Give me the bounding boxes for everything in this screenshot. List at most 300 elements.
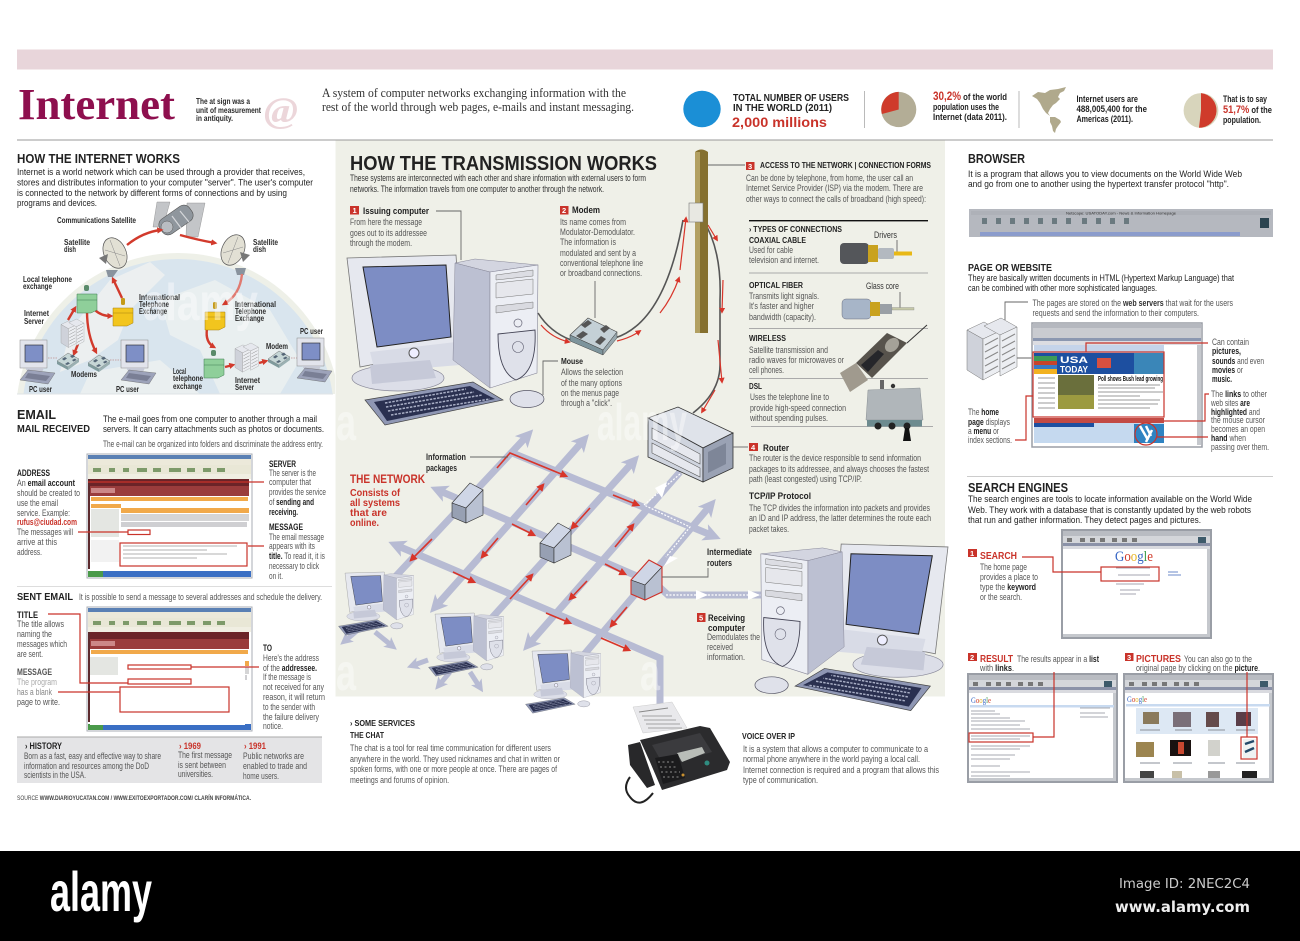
- icons: modems and PCs: [20, 338, 332, 384]
- text block: The e-mail can be organized into folders and discriminate the address entry.: [103, 439, 323, 449]
- callout: server and message: provides the service: [269, 487, 326, 497]
- stats strip: [683, 87, 1272, 133]
- intro text: rest of the world through web pages, e-mails and instant messaging.: [322, 100, 634, 114]
- callout: address: use the email: [17, 498, 58, 508]
- callout: pictures and links: passing over them.: [1211, 442, 1269, 452]
- callout: pictures and links: hand when: [1211, 433, 1246, 443]
- callout: the network: that are: [350, 507, 387, 519]
- callout: pictures and links: Can contain: [1212, 337, 1249, 347]
- icon: mouse callout: through a "click".: [561, 398, 612, 408]
- screenshot: results: Google: [971, 696, 991, 705]
- screenshot: browser toolbar: [969, 209, 1273, 237]
- item: coaxial cable: Used for cable: [749, 245, 793, 255]
- callout: address: service. Example:: [17, 508, 70, 518]
- text block: and go from one to another using the hypertext transfer protocol "http".: [968, 179, 1229, 190]
- step 3: access to the network: [708, 160, 931, 204]
- text block: [968, 169, 1242, 190]
- stat: Americas pie: 51,7% of the: [1223, 104, 1272, 116]
- note: at sign: [196, 97, 261, 123]
- icons: servers: [61, 319, 258, 372]
- text block: [968, 494, 1252, 525]
- diagram labels: exchange: [23, 282, 52, 291]
- panel: history: scientists in the USA.: [24, 770, 86, 780]
- step 2: modem: conventional telephone line: [560, 258, 643, 268]
- panel: some services: › SOME SERVICES: [350, 718, 415, 728]
- source line: SOURCE WWW.DIARIOYUCATAN.COM / WWW.EXITOEXPORTADOR.COM/ CLARÍN INFORMÁTICA.: [17, 794, 251, 802]
- item: wireless: WIRELESS: [749, 333, 786, 343]
- text block: stores and distributes information to your computer "server". The user's computer: [17, 178, 314, 188]
- callout: web servers: [1005, 298, 1233, 358]
- diagram labels: dish: [253, 245, 266, 254]
- icons: exchanges: [77, 285, 225, 378]
- step 1: issuing computer: 1: [352, 206, 357, 215]
- diagram labels: Server: [24, 317, 45, 326]
- item: optical fiber: Transmits light signals.: [749, 291, 819, 301]
- text block: programs and devices.: [17, 198, 97, 209]
- text block: servers. It can carry attachments such as photos or documents.: [103, 424, 324, 435]
- callout: to: Here's the address: [263, 653, 319, 663]
- step: search: The home page: [980, 562, 1027, 572]
- text block: [350, 173, 646, 194]
- step 2: modem: Modulator-Demodulator.: [560, 227, 635, 237]
- text block: It is a program that allows you to view documents on the World Wide Web: [968, 169, 1242, 180]
- callout: pictures and links: pictures,: [1212, 346, 1241, 356]
- callout: home page: page displays: [968, 417, 1010, 427]
- step: search: SEARCH: [980, 550, 1017, 562]
- panel: some services: [350, 718, 939, 785]
- callout: pictures and links: [1210, 337, 1269, 452]
- callout: to: reason, it will return: [263, 692, 325, 702]
- label: information packages: [426, 452, 508, 473]
- text block: is connected to the network by different forms of connections and by using: [17, 188, 287, 199]
- diagram labels: Local: [173, 367, 186, 376]
- service: the chat: The chat is a tool for real time communication for different users: [350, 743, 551, 753]
- callout: web servers: The pages are stored on the web servers that wait for the users: [1032, 298, 1233, 308]
- callout: to: of the addressee.: [263, 663, 317, 673]
- step 4: router: path (least congested) using TCP/IP.: [749, 474, 862, 484]
- service: voice over IP: [742, 731, 939, 785]
- arrows: packets: [411, 453, 638, 650]
- step: search: provides a place to: [980, 572, 1038, 582]
- stat: world population pie: population uses the: [933, 102, 999, 112]
- stat: total users: TOTAL NUMBER OF USERS: [733, 93, 849, 104]
- callout: home page: The home: [968, 407, 999, 417]
- service: voice over IP: normal phone anywhere in the world paying a local call.: [743, 754, 920, 764]
- callout: server and message: title. To read it, it is: [269, 551, 325, 561]
- step 3: access to the network: Can be done by telephone, from home, the user call an: [746, 173, 913, 183]
- panel: history: information and resources among the DoD: [24, 761, 149, 771]
- header: title and @ note: [18, 80, 298, 130]
- diagram labels: Exchange: [139, 307, 167, 316]
- heading: sent email: [17, 592, 322, 603]
- label: intermediate routers: routers: [707, 558, 732, 568]
- diagram labels: PC user: [116, 385, 140, 394]
- icon: mouse callout: Mouse: [561, 356, 583, 366]
- step 2: modem: Modem: [572, 205, 600, 215]
- icon: mouse callout: Allows the selection: [561, 367, 623, 377]
- panel: search engines: SEARCH ENGINES: [968, 481, 1068, 495]
- callout: title and message: page to write.: [17, 697, 60, 707]
- panel: history: enabled to trade and: [243, 761, 307, 771]
- label: information packages: Information: [426, 452, 466, 462]
- step: pictures: [1125, 653, 1260, 673]
- step 2: modem: modulated and sent by a: [560, 248, 636, 258]
- site url: www.alamy.com: [1115, 898, 1250, 916]
- screenshot: USA Today page: Poll shows Bush lead growing: [1098, 376, 1163, 383]
- panel: history: is sent between: [178, 760, 226, 770]
- panel: history: Public networks are: [243, 751, 304, 761]
- item: optical fiber: bandwidth (capacity).: [749, 312, 816, 322]
- callout: pictures and links: music.: [1212, 374, 1232, 384]
- callout: to: to the sender with: [263, 702, 315, 712]
- step 3: access to the network: 3: [748, 162, 752, 171]
- step 2: modem: [560, 205, 643, 318]
- watermark: alamy: [597, 394, 687, 452]
- item: wireless: cell phones.: [749, 365, 784, 375]
- panel: search engines: [968, 481, 1273, 782]
- step: pictures: 3: [1127, 653, 1131, 662]
- watermark: a: [336, 644, 357, 702]
- item: coaxial cable: [749, 230, 912, 265]
- icon: mouse callout: on the menus page: [561, 388, 619, 398]
- diagram labels: Modem: [266, 342, 288, 351]
- callout: server and message: The email message: [269, 532, 324, 542]
- callout: server and message: on it.: [269, 571, 283, 581]
- cables: [538, 218, 723, 413]
- stat: world population pie: Internet (data 2011).: [933, 112, 1007, 122]
- callout: the network: Consists of: [350, 487, 400, 499]
- list: types of connections: [749, 220, 933, 441]
- text block: The e-mail goes from one computer to another through a mail: [103, 414, 317, 425]
- callout: the network: [350, 472, 425, 529]
- arrows: signal paths: [68, 230, 266, 367]
- subheading: MAIL RECEIVED: [17, 424, 90, 435]
- item: dsl: DSL: [749, 381, 762, 391]
- step 5: receiving computer: 5: [699, 614, 703, 622]
- text block: [103, 414, 324, 449]
- callout: pictures and links: web sites are: [1210, 398, 1250, 408]
- screenshot: compose: [48, 607, 259, 731]
- step: result: The results appear in a list: [1017, 654, 1099, 664]
- callout: web servers: requests and send the information to their computers.: [1032, 308, 1199, 318]
- icon: mouse callout: of the many options: [561, 378, 622, 388]
- step 4: router: an ID and IP address, the latter determines the route each: [749, 513, 931, 523]
- callout: server and message: The server is the: [269, 468, 316, 478]
- item: coaxial cable: COAXIAL CABLE: [749, 235, 806, 245]
- service: the chat: THE CHAT: [350, 730, 385, 740]
- chart: network grid: [346, 437, 766, 704]
- screenshot: USA Today page: TODAY: [1060, 364, 1089, 376]
- step 5: receiving computer: information.: [707, 652, 745, 662]
- text block: The search engines are tools to locate information available on the World Wide: [968, 494, 1252, 504]
- service: voice over IP: VOICE OVER IP: [742, 731, 795, 741]
- callout: home page: a menu or: [968, 426, 999, 436]
- panel: email: [17, 408, 332, 802]
- label: intermediate routers: [662, 547, 752, 577]
- icon: telephone pole: [689, 150, 708, 333]
- stat: Americas pie: population.: [1223, 115, 1261, 125]
- watermark: a: [336, 394, 357, 452]
- step: search: or the search.: [980, 592, 1022, 602]
- screenshot: results: [968, 672, 1117, 782]
- logo: alamy: alamy: [50, 860, 152, 923]
- callout: title and message: messages which: [17, 639, 67, 649]
- callout: address: arrive at this: [17, 537, 57, 547]
- icon: satellite: [153, 202, 205, 238]
- step 4: router: Router: [763, 443, 789, 453]
- label: intermediate routers: Intermediate: [707, 547, 752, 557]
- step: search: type the keyword: [980, 582, 1036, 592]
- title: Internet: [18, 80, 175, 129]
- step: pictures: PICTURES: [1136, 653, 1181, 665]
- heading: HOW THE TRANSMISSION WORKS: [350, 153, 657, 175]
- item: dsl: [749, 380, 923, 441]
- screenshot: Google home: [1022, 530, 1211, 638]
- stat: Americas map: Americas (2011).: [1076, 114, 1133, 124]
- diagram labels: Server: [235, 383, 255, 392]
- step 1: issuing computer: through the modem.: [350, 238, 412, 248]
- step 3: access to the network: Internet Service Provider (ISP) via the modem. There are: [746, 183, 923, 193]
- callout: server and message: computer that: [269, 477, 311, 487]
- step: result: 2: [970, 653, 974, 662]
- callout: pictures and links: highlighted and: [1211, 407, 1260, 417]
- callout: home page: [968, 407, 1012, 445]
- arrows: around PCs: [346, 630, 479, 686]
- watermark: alamy: [143, 274, 258, 332]
- icon: dishes: [98, 231, 250, 277]
- list: types of connections: › TYPES OF CONNECTIONS: [749, 224, 842, 234]
- icon: receiving computer: [755, 544, 948, 711]
- step: pictures: original page by clicking on the picture.: [1136, 663, 1260, 673]
- text block: [968, 273, 1234, 293]
- step 4: router: 4: [751, 443, 756, 452]
- icon: mouse callout: [543, 356, 623, 408]
- text block: Web. They work with a database that is constantly updated by the web robots: [968, 505, 1251, 515]
- icon: fax machine: [626, 702, 730, 803]
- diagram labels: [23, 216, 324, 394]
- callout: server and message: appears with its: [269, 541, 315, 551]
- step 1: issuing computer: From here the message: [350, 217, 422, 227]
- panel: browser: [968, 152, 1273, 237]
- callout: server and message: SERVER: [269, 459, 296, 469]
- item: wireless: Satellite transmission and: [749, 345, 828, 355]
- label: information packages: packages: [426, 463, 457, 473]
- diagram labels: exchange: [173, 382, 202, 391]
- panel: how the internet works: [17, 154, 335, 394]
- step 5: receiving computer: received: [707, 642, 733, 652]
- diagram labels: Internet: [235, 376, 260, 385]
- service: the chat: [350, 730, 560, 785]
- callout: to: not received for any: [263, 682, 324, 692]
- stat: Americas pie: That is to say: [1223, 94, 1267, 104]
- item: optical fiber: [749, 280, 914, 322]
- step 5: receiving computer: computer: [708, 623, 745, 633]
- panel: history: The first message: [178, 750, 232, 760]
- callout: to: the failure delivery: [263, 712, 319, 722]
- icon: web servers: [967, 318, 1017, 380]
- callout: server and message: of sending and: [269, 497, 314, 507]
- step 5: receiving computer: [697, 613, 760, 662]
- callout: pictures and links: becomes an open: [1211, 424, 1265, 434]
- step 2: modem: 2: [562, 206, 566, 215]
- service: voice over IP: Internet connection is required and a program that allows this: [743, 765, 939, 775]
- callout: address: should be created to: [17, 488, 80, 498]
- icon: router: [648, 407, 733, 482]
- service: the chat: meetings and forums of opinion.: [350, 775, 449, 785]
- step 4: router: The TCP divides the information into packets and provides: [749, 503, 930, 513]
- step: result: with links.: [979, 663, 1014, 673]
- service: voice over IP: type of communication.: [743, 775, 818, 785]
- item: optical fiber: Glass core: [866, 281, 899, 291]
- callout: pictures and links: sounds and even: [1212, 356, 1264, 366]
- item: dsl: without spending pulses.: [749, 413, 828, 423]
- stat: world population pie: 30,2% of the world: [933, 91, 1007, 103]
- item: optical fiber: It's faster and higher: [749, 301, 814, 311]
- diagram labels: Communications Satellite: [57, 216, 136, 225]
- callout: title and message: The title allows: [17, 619, 64, 629]
- callout: address: address.: [17, 547, 42, 557]
- watermark: [143, 274, 687, 702]
- heading: sent email: SENT EMAIL: [17, 592, 73, 603]
- watermark: a: [640, 644, 661, 702]
- step 4: router: [733, 443, 931, 534]
- service: the chat: spoken forms, with one or more people at once. There are pages of: [350, 764, 557, 774]
- panel: history: Born as a fast, easy and effective way to share: [24, 751, 161, 761]
- callout: pictures and links: movies or: [1212, 365, 1243, 375]
- icons: network PCs: [338, 572, 601, 713]
- panel: history: › 1969: [179, 741, 201, 751]
- text block: [17, 167, 314, 209]
- callout: to: notice.: [263, 721, 283, 731]
- diagram labels: Telephone: [235, 307, 266, 316]
- step: result: [968, 653, 1099, 673]
- callout: to: [263, 643, 325, 731]
- callout: title and message: naming the: [17, 629, 52, 639]
- heading: HOW THE INTERNET WORKS: [17, 152, 180, 166]
- diagram labels: PC user: [300, 327, 324, 336]
- step 3: access to the network: ACCESS TO THE NETWORK | CONNECTION FORMS: [760, 160, 931, 170]
- callout: to: If the message is: [263, 672, 311, 682]
- diagram labels: International: [235, 300, 276, 309]
- item: dsl: Uses the telephone line to: [750, 392, 829, 402]
- item: dsl: provide high-speed connection: [750, 403, 846, 413]
- text block: networks. The information travels from one computer to another through the network.: [350, 184, 604, 194]
- callout: address: [17, 468, 80, 557]
- panel: browser: BROWSER: [968, 152, 1025, 166]
- step 5: receiving computer: Receiving: [708, 613, 745, 623]
- panel: history: › HISTORY: [25, 741, 62, 751]
- step: search: [968, 549, 1038, 602]
- text block: can be combined with other more sophisticated languages.: [968, 283, 1157, 293]
- callout: title and message: MESSAGE: [17, 667, 52, 677]
- step 1: issuing computer: [350, 206, 461, 260]
- callout: pictures and links: The links to other: [1211, 389, 1267, 399]
- stat: Americas map: Internet users are: [1076, 94, 1138, 104]
- callout: server and message: [269, 459, 326, 581]
- stat: Americas map: 488,005,400 for the: [1076, 104, 1147, 114]
- intro text: [322, 86, 634, 114]
- screenshot: image results: [1124, 672, 1273, 782]
- step 1: issuing computer: goes out to its addressee: [350, 228, 427, 238]
- diagram labels: Internet: [24, 309, 49, 318]
- callout: to: TO: [263, 643, 272, 653]
- diagram labels: Satellite: [253, 238, 278, 247]
- diagram labels: dish: [64, 245, 76, 254]
- footer band: [0, 851, 1300, 941]
- step 4: router: packages to its addressee, and always chooses the fastest: [749, 464, 929, 474]
- panel: history: universities.: [178, 769, 213, 779]
- diagram labels: Exchange: [235, 314, 264, 323]
- callout: home page: index sections.: [968, 435, 1012, 445]
- callout: address: rufus@ciudad.com: [17, 517, 77, 527]
- callout: title and message: [17, 610, 67, 707]
- stat: total users: [683, 91, 849, 130]
- callout: the network: all systems: [350, 497, 400, 509]
- diagram: satellite network: [17, 202, 335, 394]
- heading: EMAIL: [17, 408, 56, 422]
- stat: total users: IN THE WORLD (2011): [733, 103, 832, 114]
- text block: These systems are interconnected with each other and share information with external users to form: [350, 173, 646, 183]
- step 4: router: TCP/IP Protocol: [749, 491, 811, 501]
- service: the chat: anywhere in the world. They used nicknames and chat in written or: [350, 754, 560, 764]
- panel: history: [17, 736, 322, 783]
- panel: page or website: [967, 262, 1269, 452]
- step 1: issuing computer: Issuing computer: [363, 206, 429, 216]
- step: pictures: You can also go to the: [1184, 654, 1252, 664]
- panel: page or website: PAGE OR WEBSITE: [968, 262, 1052, 274]
- diagram labels: Telephone: [139, 300, 169, 309]
- callout: address: An email account: [17, 478, 75, 488]
- callout: title and message: The program: [17, 677, 57, 687]
- screenshot: browser toolbar: Netscape: USATODAY.com - News & Information Homepage: [1066, 212, 1176, 216]
- item: wireless: [749, 325, 927, 392]
- step 2: modem: or broadband connections.: [560, 268, 642, 278]
- diagram labels: International: [139, 293, 180, 302]
- icon: modem: [570, 318, 617, 355]
- callout: server and message: receiving.: [269, 507, 298, 517]
- stat: Americas map: [1032, 87, 1147, 133]
- diagram labels: telephone: [173, 374, 203, 383]
- diagram labels: Local telephone: [23, 275, 72, 284]
- stat: world population pie: [881, 91, 1007, 127]
- note: at sign: in antiquity.: [196, 114, 233, 123]
- panel: how the transmission works: [336, 140, 948, 713]
- step 4: router: packet takes.: [749, 524, 789, 534]
- panel: history: › 1991: [244, 741, 266, 751]
- step 4: router: The router is the device responsible to send information: [749, 453, 921, 463]
- step 2: modem: Its name comes from: [560, 217, 626, 227]
- screenshot: USA Today page: [1015, 323, 1209, 447]
- diagram labels: PC user: [29, 385, 53, 394]
- step 3: access to the network: other ways to connect the calls of broadband (high speed):: [746, 194, 926, 204]
- icon: at sign: @: [264, 90, 298, 130]
- note: at sign: unit of measurement: [196, 106, 261, 115]
- step: search: 1: [970, 549, 974, 558]
- callout: title and message: TITLE: [17, 610, 38, 620]
- screenshot: USA Today page: USA: [1060, 355, 1088, 366]
- heading: sent email: It is possible to send a message to several addresses and schedule the delivery.: [79, 592, 322, 602]
- image id: Image ID: 2NEC2C4: [1119, 877, 1250, 892]
- text block: that run and gather information. They detect pages and pictures.: [968, 515, 1201, 525]
- intro text: A system of computer networks exchanging information with the: [322, 86, 626, 100]
- item: wireless: radio waves for microwaves or: [749, 355, 844, 365]
- callout: the network: THE NETWORK: [350, 472, 425, 486]
- screenshot: inbox: [78, 454, 264, 578]
- item: optical fiber: OPTICAL FIBER: [749, 280, 804, 290]
- text block: They are basically written documents in HTML (Hypertext Markup Language) that: [968, 273, 1234, 283]
- screenshot: image results: Google: [1127, 695, 1147, 704]
- note: at sign: The at sign was a: [196, 97, 250, 106]
